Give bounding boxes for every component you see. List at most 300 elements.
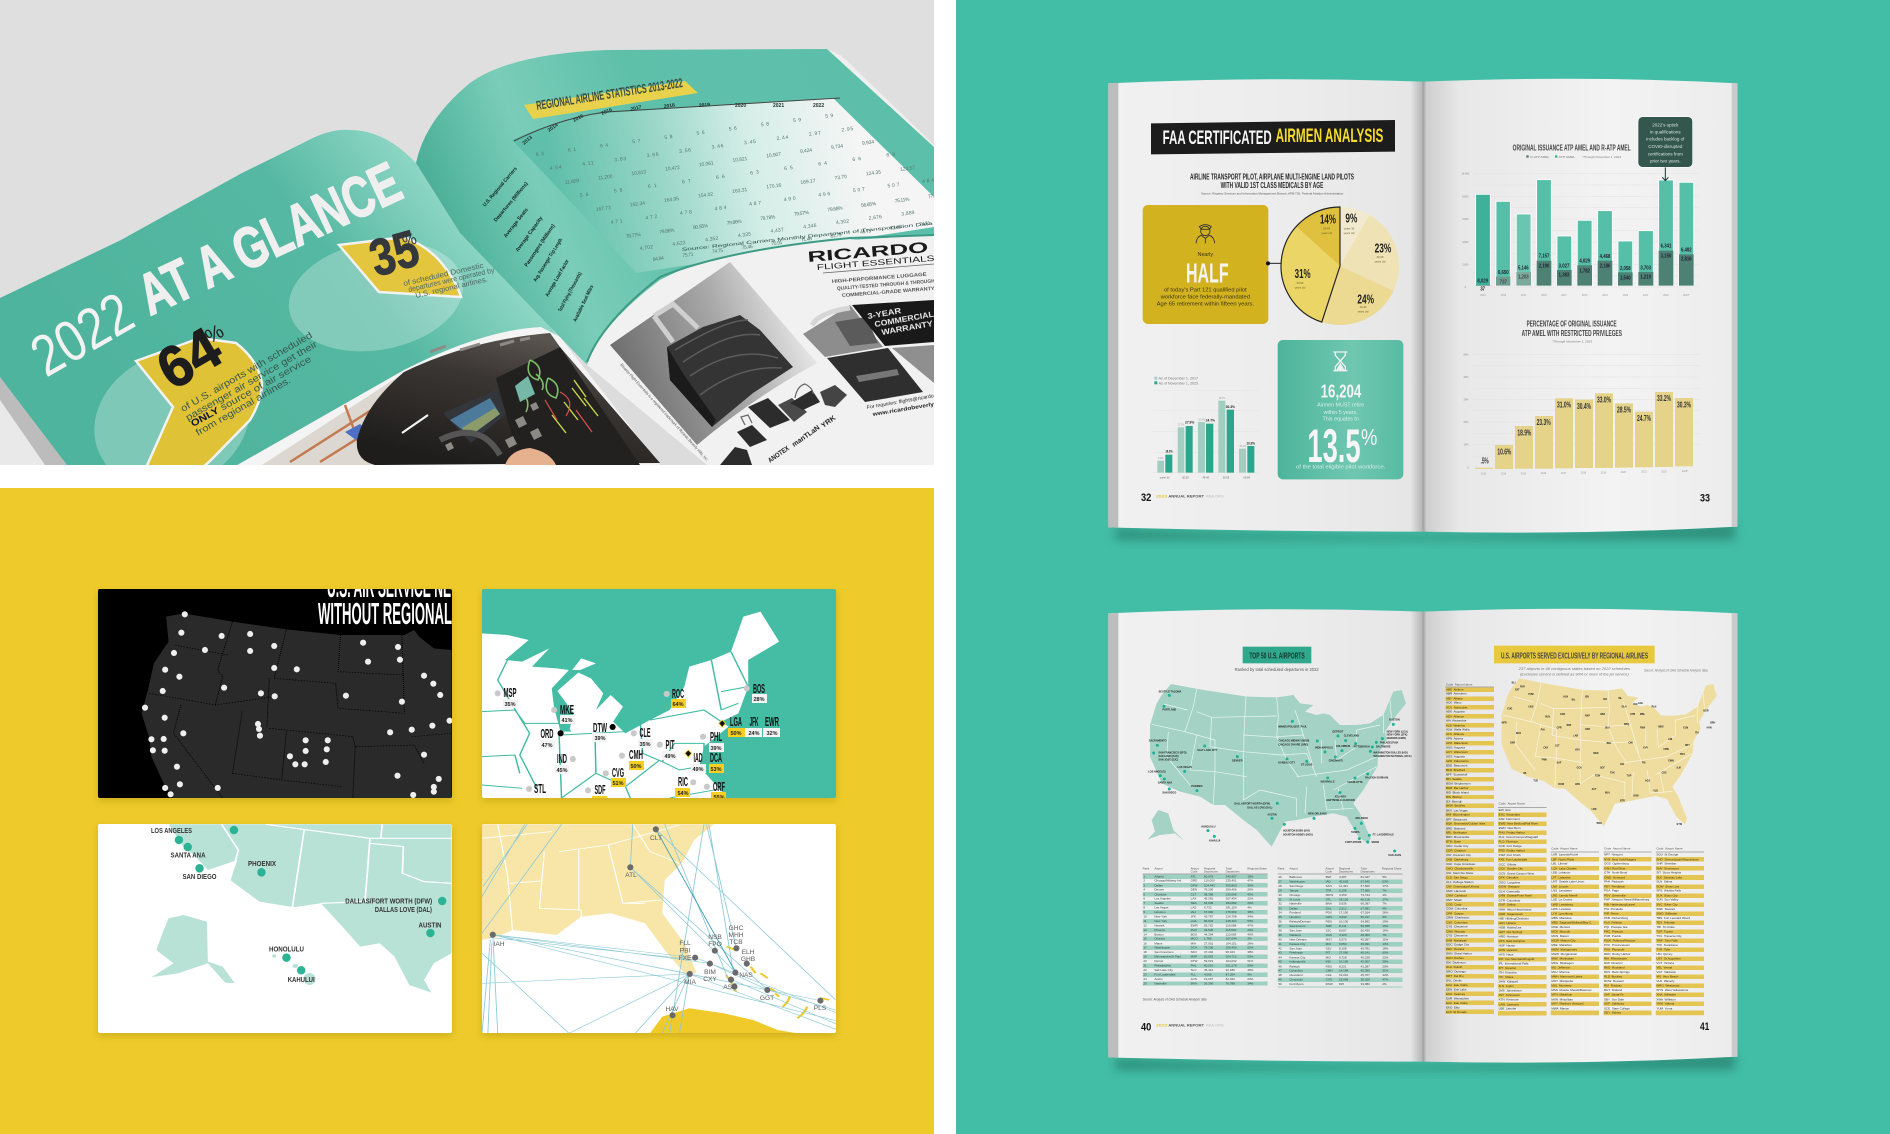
bar value labels: 37: [1480, 286, 1485, 292]
bar chart: pilots by age 2017 vs 2023: 60-64: [1243, 477, 1250, 480]
table: airports ranked 1 to 25: 18% 47% 35% 26% 43% 22% 29% 4% 38% 34% 53% 47% 29% 40% 2% 26% 52% 38% 53% 51% 59% 49% 5% 23% 34%: [1247, 875, 1253, 985]
map: United States with exclusive regional airports: [1502, 678, 1717, 826]
table: airports ranked 1 to 25: Departures: [1226, 870, 1240, 874]
table: regional airline statistics: 11,809 11,200 10,813 10,472 10,061 10,821 10,907 9,424 9,734 9,934: [564, 139, 875, 186]
percent chart year labels: 2013: [1481, 473, 1487, 476]
airport route labels: [494, 835, 827, 1013]
airport route labels: PLS: [814, 1005, 827, 1012]
map: United States with top airports: CINCINNATI: [1329, 760, 1343, 763]
bar chart year labels: 2020: [1623, 294, 1629, 297]
bar chart year labels: 2022: [1663, 294, 1669, 297]
map: United States with top airports: NEW YORK (LGA): [1387, 730, 1408, 733]
map: United States with exclusive regional airports: DLH: [1622, 706, 1627, 708]
table: regional airline statistics: 2018: [663, 102, 676, 110]
percent value labels: 10.6%: [1497, 446, 1512, 456]
chart heading: Source: Registry Services and Information Management Branch, AFB-720, Federal Aviation Administration: [1201, 192, 1344, 196]
map: United States with exclusive regional airports: GCK: [1577, 767, 1582, 769]
map: United States with exclusive regional airports: FHR: [1520, 686, 1525, 688]
percent value labels: 30.3%: [1677, 399, 1691, 409]
bar chart: pilots by age 2017 vs 2023: 31.4%: [1198, 419, 1205, 421]
callout: 16,204 airmen must retire: of the total eligible pilot workforce.: [1296, 465, 1385, 471]
percent value labels: 18.9%: [1517, 427, 1532, 437]
callout: 16,204 airmen must retire: [1278, 340, 1403, 479]
chart heading: [1190, 172, 1354, 196]
connector: [1268, 262, 1283, 265]
bar value labels: 2,186: [1600, 263, 1610, 269]
bar chart axis labels: 10,000: [1462, 173, 1470, 176]
chart heading: AIRLINE TRANSPORT PILOT, AIRPLANE MULTI-ENGINE LAND PILOTS: [1190, 172, 1354, 181]
airport route labels: TCB: [729, 939, 743, 946]
bar value labels: 5,146: [1518, 265, 1529, 271]
bar chart: pilots by age 2017 vs 2023: 27.2%: [1178, 425, 1184, 427]
map: United States with exclusive regional airports: BJI: [1603, 699, 1607, 701]
ad logo: Ricardo flight essentials: COMMERCIAL-GRADE WARRANTY: [842, 286, 936, 299]
map: United States with exclusive regional airports: GJT: [1555, 746, 1560, 748]
percent axis labels: 40%: [1464, 376, 1469, 379]
stat: 64 percent: [158, 325, 316, 436]
map: United States with top airports: HOUSTON HOBBY (HOU): [1283, 834, 1313, 837]
footer: page 40: 2023: [1156, 1024, 1168, 1028]
title: top 50 airports: TOP 50 U.S. AIRPORTS: [1249, 650, 1305, 660]
table: regional airline statistics: 2020: [735, 103, 746, 109]
map: United States with top airports: CLEVELAND: [1344, 735, 1359, 738]
table: airports ranked 26 to 50: Departures: [1361, 870, 1375, 874]
stat: 64 percent: ONLY source of air service: [189, 354, 313, 430]
map: United States with exclusive regional airports: ILM: [1677, 767, 1681, 769]
map: United States with top airports: NEWARK (EWR): [1387, 737, 1406, 740]
table: airports ranked 1 to 25: 340,907 235,401 300,860 290,456 230,066 207,454 184,082 181,150 176,582 126,798 125,304 119,088 115,832 110,669 107,044 104,151 100,450 96,103 104,712 104,032 101,278 92,180 87,254 82,043 76,788: [1226, 875, 1237, 985]
table: airports ranked 1 to 25: Atlanta Chicago/Midway Intl Dallas Denver Charlotte Los Angeles Seattle Las Vegas Houston New York New York Newark Phoenix Boston Orlando Miami Washington San Francisco Minneapolis/St Paul Detroit Philadelphia Salt Lake City Fort Lauderdale Austin Nashville: [1154, 875, 1181, 985]
map: United States with exclusive regional airports: CPR: [1557, 727, 1562, 729]
map: United States with exclusive regional airports: TUS: [1533, 781, 1538, 783]
arrow: callout to 2022 bar: [1662, 167, 1668, 181]
yellow flag: 64 percent: [136, 338, 262, 470]
airport percentages: 35%: [504, 702, 516, 708]
table: airports ranked 1 to 25: Airport: [1191, 866, 1199, 870]
map: United States with exclusive regional airports: OXR: [1510, 742, 1515, 744]
map: United States with top airports: PORTLAND: [1162, 708, 1176, 711]
map: United States with exclusive regional airports: ACT: [1592, 788, 1597, 791]
bar chart year labels: 2021: [1643, 294, 1649, 297]
map: United States with top airports: WASHINGTON DULLES (IAD): [1373, 751, 1408, 754]
airport codes: IAD: [694, 750, 702, 765]
left teal page: [0, 130, 660, 465]
callout: 2022 uptick: prior two years.: [1650, 159, 1681, 164]
table: regional airline statistics: Average Capacity: [515, 216, 544, 253]
card shadows: [98, 592, 836, 1036]
bar value labels: 3,703: [1640, 265, 1651, 271]
table: regional airline statistics: 2021: [773, 103, 784, 109]
icon: luggage row: [720, 384, 847, 465]
map: United States with exclusive regional airports: EWN: [1668, 761, 1674, 763]
translucent circle behind 35 percent: [288, 245, 464, 352]
airport codes: DTW: [593, 720, 607, 735]
map: United States with top airports: FORT MYERS: [1345, 841, 1362, 844]
text: U.S. AIR SERVICE NETWORK: [327, 569, 497, 604]
map: United States with top airports: OAKLAND (OAK): [1158, 755, 1179, 758]
bar value labels: 6,482: [1681, 247, 1692, 253]
chart title: restricted privileges: [1522, 320, 1622, 344]
bar chart: pilots by age 2017 vs 2023: As of November 1, 2023: [1159, 381, 1198, 385]
map: United States with top airports: DETROIT: [1333, 730, 1344, 733]
map: United States with exclusive regional airports: EYW: [1677, 824, 1683, 826]
map: United States with top airports: COLUMBUS: [1336, 745, 1351, 748]
callout: 16,204 airmen must retire: %: [1361, 424, 1377, 450]
airport codes: MSP: [504, 685, 517, 700]
table: airports ranked 26 to 50: Total: [1361, 866, 1367, 870]
pie chart: pilots by age: years old: [1344, 231, 1355, 235]
table: airports ranked 26 to 50: 5% 63% 17% 7% 4% 27% 7% 4% 26% 5% 29% 16% 16% 7% 11% 13% 18% 60% 22% 38% 20% 31% 42% 47% 2%: [1382, 875, 1388, 986]
airport route labels: FXE: [679, 955, 692, 962]
title banner: FAA CERTIFICATED: [1163, 128, 1272, 149]
bar chart: pilots by age 2017 vs 2023: 48.7%: [1219, 398, 1225, 400]
table column 3: regional airports: Code Airport Name: [1551, 846, 1578, 850]
map: United States with exclusive regional airports: CMI: [1628, 742, 1633, 744]
bar value labels: 3,150: [1661, 253, 1671, 259]
map: United States with exclusive regional airports: HYS: [1575, 750, 1580, 752]
pie chart: pilots by age: 40-49: [1360, 305, 1367, 309]
title banner: AIRMEN ANALYSIS: [1276, 126, 1383, 147]
pie chart: pilots by age: [1281, 207, 1399, 325]
map: United States with exclusive regional airports: TXK: [1610, 772, 1615, 774]
percent value labels: 30.4%: [1577, 401, 1591, 411]
pie chart: pilots by age: 23%: [1375, 241, 1391, 255]
page number 33: 33: [1700, 492, 1710, 504]
map: United States with top airports: SAN JUAN: [1388, 854, 1401, 857]
ad box: 3-year commercial warranty: COMMERCIAL: [874, 310, 935, 329]
bar chart: pilots by age 2017 vs 2023: 15.4%: [1239, 446, 1246, 448]
map: United States with exclusive regional airports: RAP: [1585, 715, 1590, 718]
ad photo: suitcase backdrop: [610, 262, 817, 445]
table: airports ranked 1 to 25: Regional Share: [1247, 866, 1267, 870]
map: United States with top airports: PHILADELPHIA: [1380, 741, 1399, 744]
airport percentages: 39%: [710, 746, 722, 752]
airport route labels: MHH: [728, 932, 744, 939]
table: airports ranked 1 to 25: Airport: [1154, 866, 1163, 870]
table: airports ranked 1 to 25: 60,678 110,000 104,443 76,206 98,368 45,281 54,038 6,732 67,900 42,787 66,034 55,762 33,546 44,394 1,785 27,001 78,200 37,402 60,053 53,619 60,261 45,412 4,065 19,097 26,390: [1204, 875, 1215, 985]
map: United States with exclusive regional airports: HLN: [1563, 696, 1568, 698]
map: United States with exclusive regional airports: LWS: [1528, 706, 1534, 708]
card headline: WITHOUT REGIONAL: [318, 596, 452, 631]
bar chart: pilots by age 2017 vs 2023: 30.3%: [1226, 404, 1235, 409]
bar chart year labels: 2014: [1501, 294, 1507, 297]
bar chart axis labels: 2,000: [1462, 264, 1469, 267]
airport percentages: 41%: [561, 718, 573, 724]
table: airports ranked 26 to 50: 4,287 42,603 11,431 5,106 3,259 18,120 5,636 2,512 17,150 3,032 16,130 8,141 8,007 3,320 5,070 6,054 8,108 27,060 9,728 16,100 8,221 14,184 19,010 18,056 815: [1339, 875, 1348, 986]
map: United States with top airports: SAN FRANCISCO (SFO): [1158, 751, 1187, 754]
airport route labels: GGT: [760, 995, 774, 1002]
ad box: 3-year commercial warranty: WARRANTY: [881, 319, 934, 337]
brand names: ANOTEX: [767, 445, 791, 465]
percent value labels: 23.3%: [1537, 417, 1551, 427]
bar value labels: 2,816: [1681, 257, 1692, 263]
map: United States with top airports: [1148, 684, 1412, 857]
chart title: original issuance: ATP AMEL: [1559, 155, 1576, 159]
bar value labels: 4,029: [1579, 259, 1590, 265]
airport codes: ORD: [540, 726, 554, 741]
map: United States with exclusive regional airports: CNY: [1543, 747, 1549, 749]
right magazine page paper edge: [828, 50, 934, 147]
callout: nearly half: workforce face federally-mandated: [1160, 295, 1250, 301]
map: United States with exclusive regional airports: FSM: [1595, 776, 1600, 778]
bar chart year labels: 2013: [1480, 294, 1486, 297]
airport percentages: 39%: [594, 736, 606, 742]
chart title: original issuance: R-ATP AMEL: [1530, 155, 1550, 159]
table column 5: regional airports: SGU St George SHD Shenandoah/Waynesboro SHR Sheridan SHV Shreveport SIT Sioux Heights SLK Saranac Lake SLN Salina SOW Show Low SPS Wichita Falls SUX Sioux City SUN Sun Valley SVC Silver City SWF Stewart SWO Stillwater TBN Fort Leonard Wood TEX Telluride TRI Tri-Cities TUP Tupelo TVC Traverse City TWF Twin Falls TXK Texarkana TYR Tyler UIN Quincy UST St Augustine VCT Victoria VEL Vernal VGT Valdosta VIS Vero Beach VLD Waverly WRG Westwood WYS West Yellowstone XNA Stillwater XWA Williston YKM Yakima YUM Yuma: [1656, 853, 1699, 1010]
title banner: [1151, 120, 1395, 154]
airport percentages: 24%: [748, 731, 760, 737]
map: United States with exclusive regional airports: CDR: [1585, 729, 1590, 731]
bar chart: pilots by age 2017 vs 2023: 16.0%: [1165, 448, 1173, 453]
percent chart year labels: 2016: [1541, 472, 1547, 475]
bar chart axis labels: 6,000: [1462, 218, 1469, 221]
icon: suitcase: [654, 304, 793, 427]
table: regional airline statistics: Average Load Factor: [545, 259, 571, 298]
airport route labels: GHC: [729, 925, 744, 932]
table column 2: regional airports: Code Airport Name: [1499, 802, 1525, 806]
ad box: 3-year commercial warranty: 3-YEAR: [867, 306, 902, 321]
airport codes: PHL: [710, 729, 722, 744]
map: United States with top airports: HARTSFIELD-JACKSON: [1326, 799, 1355, 802]
map: United States with top airports: DENVER: [1232, 759, 1243, 762]
table: airports ranked 26 to 50: [1278, 866, 1403, 988]
airport route labels: CXY: [703, 976, 717, 983]
map: United States with exclusive regional airports: BIL: [1572, 700, 1576, 702]
map: United States with exclusive regional airports: ROW: [1558, 784, 1565, 786]
map: United States with top airports: CHICAGO O'HARE (ORD): [1278, 743, 1308, 746]
airport codes: STL: [534, 781, 546, 796]
map: United States with exclusive regional airports: TRI: [1642, 762, 1646, 764]
map: United States with top airports: NEW ORLEANS: [1308, 813, 1327, 816]
table: regional airline statistics: 78.77% 79.86% 80.55% 79.86% 79.78% 79.57% 79.68% 56.65% 75.11% 77.49%: [625, 192, 944, 240]
airport route labels: CLT: [650, 835, 662, 842]
table: airports ranked 1 to 25: ATL ORD DFW DEN CLT LAX SEA LAS IAH JFK LGA EWR PHX BOS MCO MIA DCA SFO MSP DTW PHL SLC FLL AUS BNA: [1191, 875, 1198, 985]
map: United States with exclusive regional airports: COD: [1560, 714, 1565, 716]
percent value labels: 28.5%: [1617, 404, 1631, 414]
airport route labels: NSB: [708, 934, 722, 941]
map: United States with top airports: DALLAS/FORT WORTH (DFW): [1234, 802, 1270, 805]
bar value labels: 1,219: [1640, 275, 1651, 281]
pie chart: pilots by age: 24%: [1357, 292, 1374, 306]
map: United States with exclusive regional airports: RIW: [1567, 725, 1572, 727]
table: airports ranked 26 to 50: Airport: [1289, 866, 1298, 870]
map: United States with top airports: SAN JOSE (SJC): [1158, 759, 1178, 762]
stat: 35 percent: [370, 230, 494, 298]
airport percentages: 51%: [612, 781, 624, 787]
footer: page 32: [1141, 492, 1224, 504]
map: United States with top airports: CHICAGO MIDWAY (MDW): [1278, 739, 1309, 742]
panel: yellow background with map cards: [0, 488, 934, 1134]
map: United States with exclusive regional airports: MFR: [1502, 722, 1507, 724]
map: United States with exclusive regional airports: BGR: [1703, 711, 1709, 713]
callout: 16,204 airmen must retire: 13.5: [1307, 420, 1361, 473]
bar value labels: 1,782: [1579, 268, 1590, 274]
table: airports ranked 26 to 50: 81,427 67,645 67,566 77,065 73,744 68,118 66,397 67,951 67,014 65,217 54,892 50,558 50,430 48,003 45,057 45,991 45,781 45,141 45,228 42,007 41,287 45,399 45,707 38,028 33,983: [1361, 875, 1370, 986]
table: airports ranked 26 to 50: Code: [1325, 870, 1333, 874]
map: United States with exclusive regional airports: ERI: [1668, 739, 1673, 741]
ad contact lines: For Inquiries: flights@ricardo: [866, 393, 935, 411]
map: United States with top airports: SAN DIEGO: [1162, 792, 1176, 795]
bar chart: pilots by age 2017 vs 2023: [1153, 377, 1258, 480]
map: United States with exclusive regional airports: TUP: [1627, 776, 1632, 778]
table: regional airline statistics: 2014: [547, 122, 559, 134]
ad image: luggage handle: [803, 305, 883, 357]
map: United States with top airports: LOS ANGELES: [1148, 770, 1166, 773]
table: regional airline statistics: 84.94 75.71 74.75 75.46 70.91 71.46 81.79 46.75 62.43 74.51: [652, 220, 931, 263]
map: United States with top airports: SALT LAKE CITY: [1197, 749, 1218, 752]
map: United States with exclusive regional airports: FMN: [1542, 760, 1547, 762]
airport codes: SDF: [594, 782, 606, 797]
percent chart year labels: 2020: [1621, 471, 1627, 474]
bar chart: pilots by age 2017 vs 2023: 30-39: [1182, 477, 1189, 480]
airport codes: ORF: [713, 779, 725, 794]
table: regional airline statistics: 4,702 4,622 4,352 4,335 4,437 4,346 4,302 2,676 3,889 3,759: [639, 206, 948, 252]
table: airports ranked 26 to 50: Regional: [1339, 866, 1351, 870]
airport percentages: 64%: [672, 702, 684, 708]
card headline: [318, 589, 452, 624]
map: United States with exclusive regional airports: BLI: [1512, 682, 1516, 684]
map: United States with exclusive regional airports: EAT: [1515, 689, 1520, 692]
ad contact lines: www.ricardobeverly: [871, 402, 936, 418]
map: United States with top airports: FT. LAUDERDALE: [1373, 834, 1394, 837]
map: United States with top airports: PITTSBURGH: [1354, 746, 1370, 749]
chart title: original issuance: ORIGINAL ISSUANCE ATP AMEL AND R-ATP AMEL: [1513, 144, 1631, 153]
city labels: KAHULUI: [288, 975, 315, 984]
map: United States with exclusive regional airports: AGS: [1645, 780, 1650, 783]
magazine spread: page 40, top 50 U.S. airports: [1108, 609, 1423, 1062]
map: United States with exclusive regional airports: CHS: [1662, 772, 1667, 774]
chart heading: WITH VALID 1ST CLASS MEDICALS BY AGE: [1221, 181, 1324, 190]
airport percentages: 47%: [541, 743, 553, 749]
bar chart year labels: 2016: [1541, 294, 1547, 297]
airport codes: LGA: [730, 714, 742, 729]
title banner: exclusive regional airports: U.S. AIRPORTS SERVED EXCLUSIVELY BY REGIONAL AIRLINES: [1501, 651, 1648, 660]
magazine spread: page 33, issuance charts: [1423, 79, 1737, 533]
footer: page 32: RAA.ORG: [1206, 494, 1224, 498]
chart title: restricted privileges: *Through November 1, 2023: [1552, 340, 1593, 344]
panel: teal background with magazine spreads: [956, 0, 1890, 1134]
percent chart year labels: 2021: [1641, 471, 1647, 474]
table: airports ranked 1 to 25: Code: [1191, 870, 1198, 874]
city labels: PHOENIX: [248, 859, 276, 868]
bar value labels: 1,383: [1559, 273, 1569, 279]
pie chart: pilots by age: years old: [1321, 231, 1333, 235]
bar chart year labels: 2019: [1602, 294, 1608, 297]
table column 1: regional airports: Code Airport Name: [1446, 683, 1473, 687]
map: United States with exclusive regional airports: LAR: [1573, 735, 1578, 738]
airport route labels: HAV: [665, 1006, 679, 1013]
callout: nearly half: [1143, 205, 1268, 324]
stat: 64 percent: of U.S. airports with scheduled: [179, 330, 314, 415]
percent value labels: 24.7%: [1637, 413, 1651, 423]
yellow flag: 35 percent: [339, 237, 461, 297]
map: United States with top airports: SANTA ANA: [1158, 781, 1172, 784]
notes: Source: Analysis of OAG Schedule Analyser data: [1644, 669, 1708, 673]
bar chart axis labels: 8,000: [1462, 195, 1469, 198]
icon: pilot: [1196, 225, 1215, 243]
panel: 2022 at a glance magazine photo: [0, 0, 934, 465]
city labels: [151, 826, 442, 984]
city labels: LOS ANGELES: [151, 826, 192, 835]
table column 4: regional airports: Code Airport Name: [1604, 846, 1631, 850]
map: United States with exclusive regional airports: SUN: [1545, 716, 1550, 718]
notes: (Exclusive service is defined as 90% or more of the jet service): [1520, 672, 1629, 677]
callout: nearly half: Age 65 retirement within fifteen years.: [1157, 302, 1255, 308]
map: United States with exclusive regional airports: ABR: [1600, 713, 1605, 716]
bar chart: pilots by age 2017 vs 2023: 40-49: [1202, 477, 1209, 480]
map: United States with exclusive regional airports: ATW: [1630, 713, 1636, 716]
table: regional airline statistics: Avg. Passenger Trip Length: [533, 237, 564, 283]
map: United States with top airports: SEATTLE-TACOMA: [1159, 690, 1182, 693]
map: United States with exclusive regional airports: VLD: [1653, 791, 1658, 793]
map: United States with top airports: INDIANAPOLIS: [1315, 746, 1333, 749]
brand names: YRK: [820, 415, 837, 430]
airport codes: PIT: [666, 737, 675, 752]
notes: [1518, 666, 1708, 677]
map: United States with exclusive regional airports: PUW: [1528, 694, 1535, 696]
map: United States with top airports: BOSTON: [1389, 719, 1400, 722]
callout: nearly half: Nearly: [1198, 252, 1213, 258]
bar value labels: 6,650: [1498, 270, 1509, 276]
stat: 35 percent: of scheduled Domestic: [402, 261, 485, 288]
airport codes: RIC: [678, 774, 688, 789]
stat: 35 percent: %: [400, 231, 419, 251]
map: United States with exclusive regional airports: EKO: [1516, 733, 1521, 735]
spread shadow: bottom: [1115, 1052, 1735, 1070]
map: United States with exclusive regional airports: ITH: [1695, 732, 1699, 734]
chart title: restricted privileges: PERCENTAGE OF ORIGINAL ISSUANCE: [1527, 320, 1617, 329]
table: regional airline statistics: 56 58 61 67 66 63 65 64 66 68: [579, 151, 896, 199]
percent value labels: [1481, 393, 1691, 465]
map: United States with exclusive regional airports: BRL: [1607, 743, 1612, 745]
stat: 64 percent: %: [202, 320, 228, 348]
bar value labels: 2,058: [1620, 266, 1631, 272]
table: airports ranked 1 to 25: Departures: [1204, 870, 1219, 874]
map: United States with top airports: ORLANDO: [1355, 817, 1368, 820]
page number 41: 41: [1700, 1021, 1709, 1033]
map: United States with exclusive regional airports: SBY: [1685, 745, 1690, 747]
pie chart: pilots by age: 31%: [1295, 267, 1311, 281]
airport route labels: NAS: [739, 972, 753, 979]
airport codes: CVG: [612, 765, 624, 780]
city labels: DALLAS LOVE (DAL): [375, 905, 432, 914]
airport codes: BOS: [753, 681, 765, 696]
airport codes: CLE: [640, 725, 651, 740]
table: regional airline statistics: 4.54 4.11 3.83 3.66 3.56 3.46 3.45 2.44 2.97 2.95: [549, 126, 854, 172]
translucent circle behind 64 percent: [94, 364, 248, 465]
title: top 50 airports: [1243, 647, 1311, 663]
city labels: HONOLULU: [269, 944, 304, 954]
stat: 64 percent: 64: [146, 315, 232, 402]
percent chart year labels: 2023*: [1682, 470, 1688, 473]
map: United States with top airports: SACRAMENTO: [1149, 740, 1167, 743]
map: United States with exclusive regional airports: EAU: [1638, 702, 1644, 705]
map: United States with exclusive regional airports: CRW: [1663, 749, 1670, 751]
table: regional airline statistics: 2017: [630, 104, 642, 113]
callout: 2022 uptick: includes backlog of: [1646, 137, 1685, 142]
city labels: AUSTIN: [418, 920, 442, 930]
bar value labels: 8,029: [1477, 278, 1488, 284]
bar value labels: 1,540: [1620, 275, 1631, 281]
bar value labels: 737: [1500, 279, 1507, 285]
notes: 237 airports in 48 contiguous states based on 2022 schedules: [1518, 666, 1630, 671]
headline: 2022: 2022: [20, 280, 144, 389]
ad logo: Ricardo flight essentials: HIGH-PERFORMANCE LUGGAGE: [832, 272, 928, 285]
airport codes: DCA: [710, 750, 722, 765]
bar chart year labels: 2023*: [1683, 294, 1690, 297]
map: United States with top airports: DALLAS LOVE (DAL): [1247, 806, 1272, 809]
table column 1: regional airports: ABE Abilene ABR Aberdeen ABY Albany ACK Waco ACV Nantucket ADK Augusta AEX Alliance AIA Alexandria ALB Waterloo ALW Walla Walla ALO Alliance APN Alpena AZO Watertown AUG Augusta ACY Watertown AGS Augusta AZO Kalamazoo BDE Beaumont BFD Bradford BFF Scottsbluff BFI Seattle BGM Binghamton BHB Bar Harbor BID Block Island BIS Bishop BJI Bemidji BKW Beckley BKX Las Vegas BMI Bloomington BPT Beaumont BQK Brunswick/Golden Isles BRD Brainerd BRL Burlington BRO Brownsville BTM Butte CDC Cedar City CDR Chadron CGI Crescent City CKB Clarksburg CGF Cape Girardeau CHO Charlottesville CIU Sault Ste Marie CLD San Diego CLL College Station CMI Champaign/Urbana CMX Hancock CNM Carlsbad CMY Moab COD Cody COM Columbia CPR Casper CRW Charleston CSG Columbus CYS Cheyenne CWA Wausau CYS Cheyenne DAB Mahalpali DDC Dodge City DEC Decatur DHN Sheal Harbor DHN Dothan DIK Dickinson DLH Duluth DRO Durango DRT Del Rio DVL Devils EAU Eau Claire EEN Erie Lake EKO Kearney EAR Wenatchee EAU Eau Claire EKO Elko ELD El Dorado: [1446, 688, 1485, 1013]
